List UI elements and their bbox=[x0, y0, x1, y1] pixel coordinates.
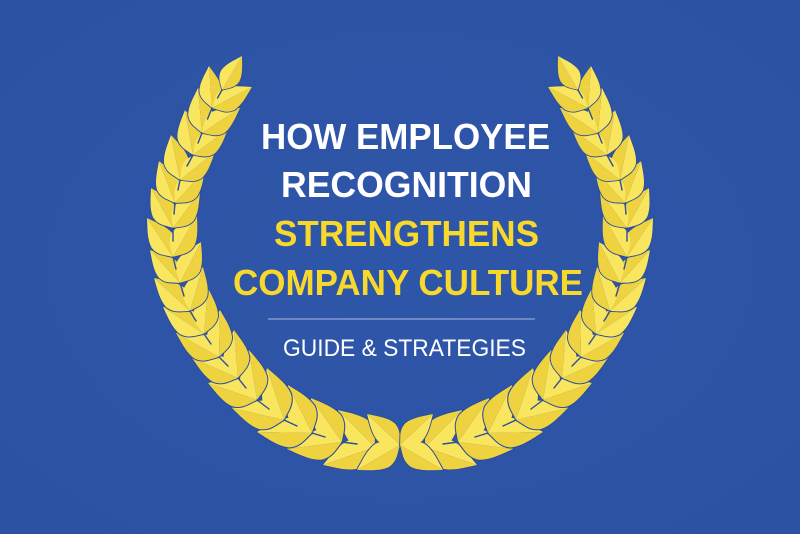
title line: how employee: HOW EMPLOYEE bbox=[261, 116, 550, 157]
title line: company culture: COMPANY CULTURE bbox=[233, 262, 583, 303]
title bbox=[233, 116, 583, 303]
divider bbox=[268, 318, 535, 320]
subtitle: GUIDE & STRATEGIES bbox=[283, 335, 526, 362]
title line: recognition: RECOGNITION bbox=[281, 164, 532, 205]
title line: strengthens: STRENGTHENS bbox=[274, 213, 539, 254]
left laurel branch bbox=[136, 51, 408, 482]
right laurel branch bbox=[392, 51, 664, 482]
